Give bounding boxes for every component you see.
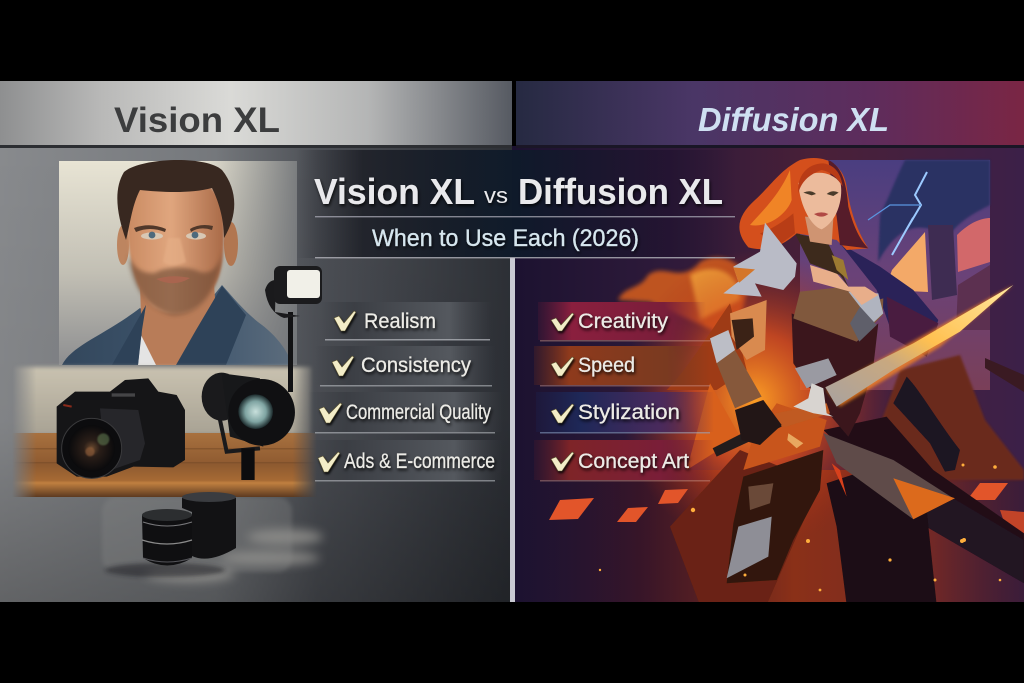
shelf with backdrop <box>12 367 317 497</box>
left cape fire <box>667 303 747 390</box>
embers <box>599 464 1001 591</box>
item: Speed <box>534 346 710 386</box>
list: Vision XL strengths <box>308 302 503 482</box>
hair <box>117 160 234 240</box>
back leg <box>827 470 937 605</box>
floor lighter patches <box>145 529 323 582</box>
icon: studio light <box>265 266 322 392</box>
sleeve <box>732 318 754 350</box>
corset <box>792 313 878 437</box>
eyes and brows <box>134 225 213 240</box>
right arm dark <box>893 377 960 472</box>
title block <box>296 150 736 258</box>
orange clouds <box>618 257 750 340</box>
item: Commercial Quality: Commercial Quality <box>346 401 491 424</box>
item: Consistency: Consistency <box>361 354 471 377</box>
icon: DSLR camera <box>57 378 185 478</box>
item: Concept Art: Concept Art <box>578 450 689 473</box>
icon: lens on tripod <box>202 373 295 480</box>
item: Ads & E-commerce: Ads & E-commerce <box>344 450 495 473</box>
grey skirt panel <box>823 433 953 519</box>
neck <box>805 217 833 245</box>
list: Diffusion XL strengths <box>534 302 714 482</box>
nose and lips <box>156 238 190 283</box>
neck <box>140 285 216 365</box>
arm skin <box>730 300 767 360</box>
stubble beard <box>128 250 223 315</box>
fire glow <box>626 259 882 514</box>
collar <box>112 286 246 365</box>
hair <box>739 158 868 250</box>
shirt <box>62 285 292 365</box>
item: Creativity: Creativity <box>578 310 668 333</box>
glove <box>735 400 782 445</box>
item: Ads & E-commerce <box>308 440 503 482</box>
item: Consistency <box>315 346 495 386</box>
item: Realism: Realism <box>364 310 436 333</box>
belt <box>795 358 837 388</box>
item: Commercial Quality <box>308 392 503 434</box>
lower cape right <box>823 417 1024 570</box>
shoulder armor <box>723 223 797 297</box>
lower left cape <box>670 450 804 602</box>
item: Creativity <box>538 302 710 342</box>
chest skin <box>810 265 878 305</box>
warrior figure <box>667 158 1024 605</box>
panel: Diffusion XL side <box>512 146 1024 605</box>
item: Stylization: Stylization <box>578 401 680 424</box>
icon: two small lenses <box>105 492 236 577</box>
heading text: Diffusion XL <box>698 101 889 138</box>
fire skirt <box>743 403 827 470</box>
item: Speed: Speed <box>578 354 635 377</box>
face <box>798 173 841 229</box>
panel: Vision XL side <box>0 146 512 602</box>
floating shards <box>549 483 1008 522</box>
bracer <box>717 350 762 408</box>
front leg <box>727 450 823 583</box>
main title: Diffusion XL <box>518 171 723 212</box>
subtitle: When to Use Each (2026) <box>372 225 639 252</box>
item: Concept Art <box>534 440 714 482</box>
main title: Vision XL <box>314 171 475 212</box>
header: Diffusion XL <box>516 81 1024 148</box>
center divider <box>510 258 515 602</box>
item: Realism <box>320 302 492 340</box>
breast armor <box>793 287 883 342</box>
sky image <box>800 160 990 390</box>
ears <box>117 225 129 265</box>
white tee <box>138 335 156 365</box>
heading text: Vision XL <box>114 101 280 140</box>
face <box>127 177 224 314</box>
portrait photo <box>59 160 297 365</box>
header: Vision XL <box>0 81 512 148</box>
item: Stylization <box>536 392 714 434</box>
lightning <box>892 172 927 255</box>
main title <box>314 171 723 212</box>
main title: vs <box>484 183 508 208</box>
sword <box>713 285 1013 457</box>
back cape <box>840 243 938 357</box>
ember ground <box>595 354 1024 602</box>
collar and necklace <box>795 233 848 287</box>
